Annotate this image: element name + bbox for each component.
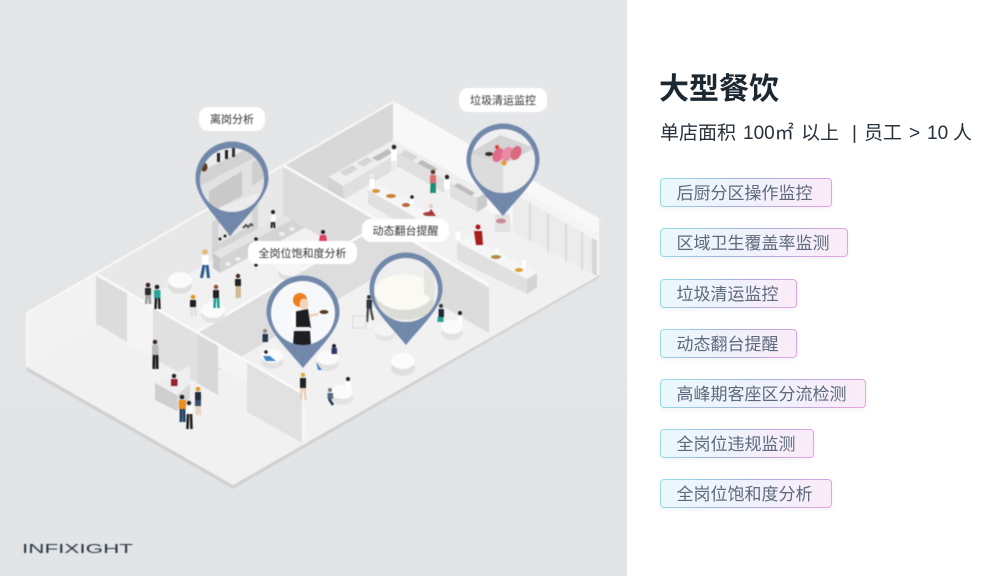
subheading: store size and staff: 单店面积 <box>660 123 736 144</box>
tag: 全岗位饱和度分析: 全岗位饱和度分析 <box>676 485 812 504</box>
map pin: 垃圾清运监控 <box>466 124 540 216</box>
heading: 大型餐饮: 大型餐饮 <box>659 73 779 106</box>
subheading: store size and staff: | <box>852 123 857 144</box>
tag: 高峰期客座区分流检测 <box>660 379 866 408</box>
map pin: 动态翻台提醒 <box>370 252 442 345</box>
tag: 动态翻台提醒 <box>660 329 797 358</box>
kitchen back counter <box>328 140 487 212</box>
label: 动态翻台提醒: 动态翻台提醒 <box>372 224 438 238</box>
hall guests <box>145 210 327 316</box>
tag: 高峰期客座区分流检测: 高峰期客座区分流检测 <box>676 385 846 404</box>
panel: floor plan background <box>0 0 627 576</box>
reception desk <box>155 366 190 411</box>
interior wall B with doorways <box>96 274 305 443</box>
label: 离岗分析: 离岗分析 <box>210 112 254 126</box>
subheading: store size and staff <box>660 122 972 144</box>
label: 全岗位饱和度分析: 全岗位饱和度分析 <box>258 246 346 260</box>
subheading: store size and staff: 10 <box>927 123 948 144</box>
tag: 垃圾清运监控 <box>660 279 797 308</box>
dining guests <box>262 295 462 405</box>
kitchen island 1 <box>368 184 440 240</box>
subheading: store size and staff: 员工 <box>864 123 902 144</box>
tag: 动态翻台提醒: 动态翻台提醒 <box>676 335 778 354</box>
label: 离岗分析 <box>199 107 265 131</box>
dining tables <box>168 260 463 405</box>
logo: INFIXIGHT: INFIXIGHT <box>22 541 133 556</box>
tag: 全岗位违规监测 <box>660 429 814 458</box>
interior wall C between hall and dining <box>197 222 384 383</box>
trash station box <box>495 214 510 232</box>
tag: 区域卫生覆盖率监测 <box>660 228 848 257</box>
tag: 后厨分区操作监控 <box>660 178 832 207</box>
refrigerator row <box>513 189 600 276</box>
subheading: store size and staff: 以上 <box>801 123 839 144</box>
tag: 后厨分区操作监控: 后厨分区操作监控 <box>676 184 812 203</box>
subheading: store size and staff: 人 <box>953 123 972 144</box>
tag: 区域卫生覆盖率监测: 区域卫生覆盖率监测 <box>676 234 830 253</box>
map pin: 全岗位饱和度分析 <box>266 276 340 368</box>
label: 垃圾清运监控: 垃圾清运监控 <box>470 93 536 107</box>
subheading: store size and staff: 100㎡ <box>743 123 794 144</box>
kitchen staff <box>370 145 526 268</box>
label: 全岗位饱和度分析 <box>248 241 357 264</box>
label: 动态翻台提醒 <box>362 219 449 242</box>
tag: 全岗位饱和度分析 <box>660 479 832 508</box>
kitchen island 2 <box>457 236 537 294</box>
lobby guests <box>152 340 201 429</box>
floor slab <box>27 156 600 489</box>
map pin: 离岗分析 <box>196 140 268 236</box>
outer walls <box>27 102 600 367</box>
tag: 垃圾清运监控: 垃圾清运监控 <box>676 285 778 304</box>
subheading: store size and staff: > <box>909 123 920 144</box>
label: 垃圾清运监控 <box>459 88 547 112</box>
tag: 全岗位违规监测: 全岗位违规监测 <box>676 435 796 454</box>
isometric floor plan illustration <box>22 88 600 556</box>
interior wall A between kitchen and dining <box>283 165 489 333</box>
bar unit and counter <box>212 179 310 273</box>
